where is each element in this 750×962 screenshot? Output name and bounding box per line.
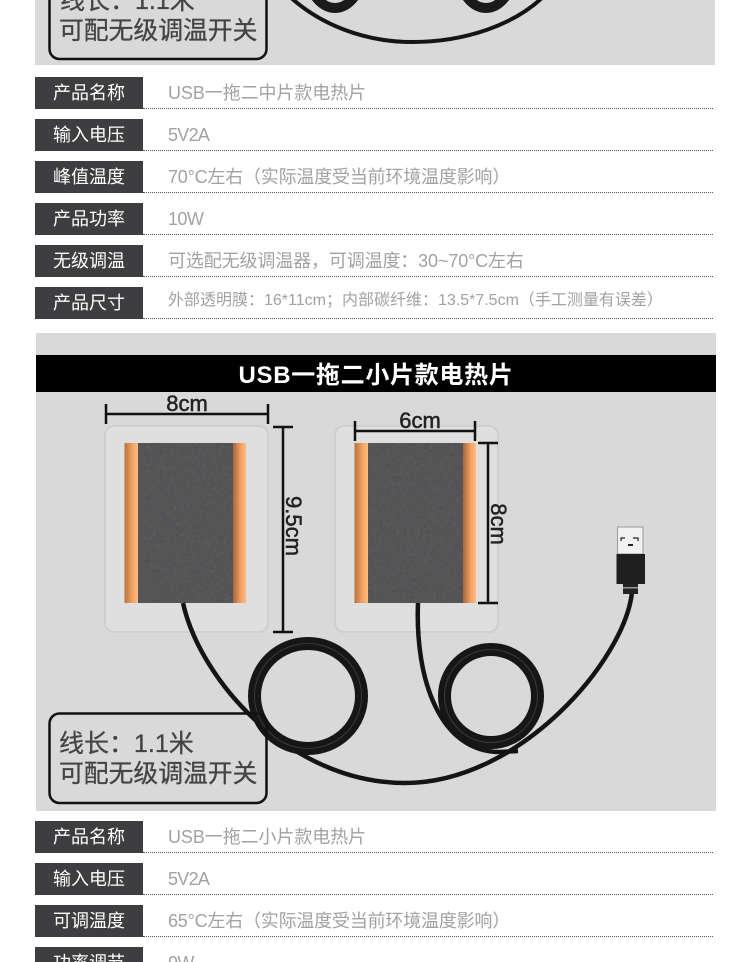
spec row: power: 10W [168,209,203,229]
spec row: product size: 外部透明膜：16*11cm；内部碳纤维：13.5*7.5cm（手工测量有误差） [168,292,663,309]
spec row: stepless temperature control: 无级调温 [53,251,125,271]
dimension: 8cm height [478,443,511,603]
spec row: product name (small): USB一拖二小片款电热片 [168,827,366,847]
right pad [335,426,498,632]
spec row: input voltage (small): 输入电压 [53,869,125,889]
heading: small pad title bar [36,355,716,392]
dimension: 8cm width: 8cm [166,391,208,416]
spec row: peak temperature: 峰值温度 [53,167,125,187]
callout: cable length: 可配无级调温开关 [59,760,257,788]
spec row: power [35,203,713,235]
spec row: stepless temperature control [35,245,713,277]
spec row: input voltage: 5V2A [168,125,209,145]
spec row: adjustable temperature (small) [35,905,713,937]
spec row: product name: 产品名称 [53,83,125,103]
spec row: input voltage (small) [35,863,713,895]
dimension: 6cm width: 6cm [399,408,441,433]
spec row: product name: USB一拖二中片款电热片 [168,83,366,103]
cables and coils [183,592,632,783]
spec row: stepless temperature control: 可选配无级调温器，可调温度：30~70°C左右 [168,251,524,271]
dimension: 9.5cm height [273,427,306,632]
left pad [105,426,268,632]
spec row: input voltage: 输入电压 [53,125,125,145]
dimension: 6cm width [355,408,475,441]
cropped cables and callout of top diagram [48,0,543,60]
callout: cable length: 线长：1.1米 [59,730,194,758]
panel: top product diagram (cropped) [35,0,715,65]
spec row: input voltage [35,119,713,151]
spec row: adjustable temperature (small): 可调温度 [53,911,125,931]
spec row: adjustable temperature (small): 65°C左右（实际温度受当前环境温度影响） [168,911,510,931]
spec row: peak temperature [35,161,713,193]
spec row: power: 产品功率 [53,209,125,229]
dimension: 8cm height: 8cm [486,503,511,545]
panel: small heating pad diagram background [36,333,716,811]
icon: USB plug [616,527,645,594]
callout: cable length [50,714,266,803]
spec row: power adjustment (small, cropped) [35,947,194,962]
spec row: product size: 产品尺寸 [53,293,125,313]
spec row: product name (small): 产品名称 [53,827,125,847]
cropped cables and callout of top diagram: 可配无级调温开关 [59,17,257,45]
spec row: product name [35,77,713,109]
spec row: product name (small) [35,821,713,853]
spec row: input voltage (small): 5V2A [168,869,209,889]
dimension: 8cm width [106,391,268,424]
spec row: product size [35,287,713,319]
spec row: peak temperature: 70°C左右（实际温度受当前环境温度影响） [168,167,510,187]
dimension: 9.5cm height: 9.5cm [281,496,306,556]
heading: small pad title bar: USB一拖二小片款电热片 [238,362,514,389]
